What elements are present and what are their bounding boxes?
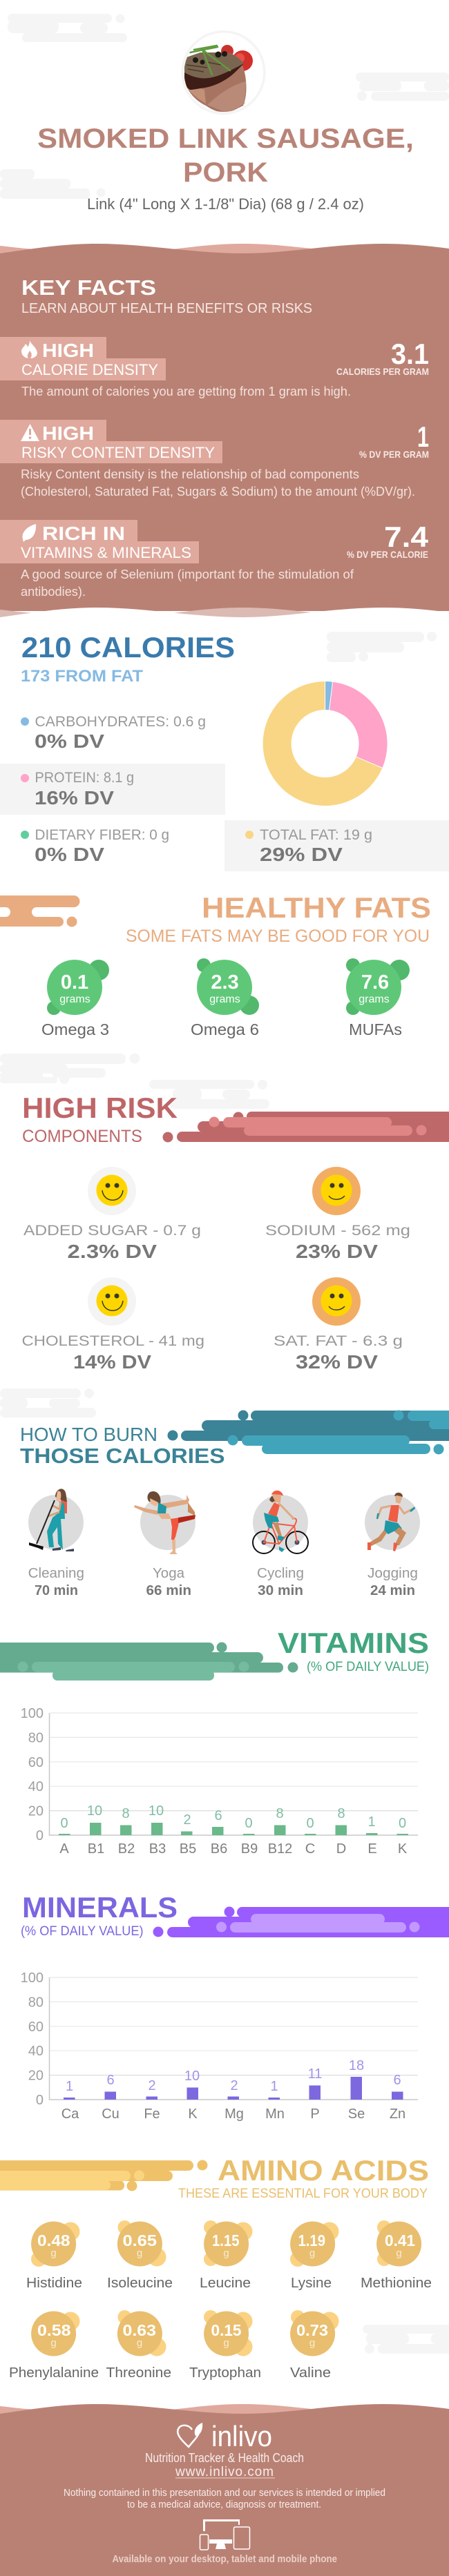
amino: threonine	[106, 2310, 171, 2381]
vitamins bar chart: E	[367, 1841, 377, 1857]
minerals bar chart: Fe	[144, 2107, 160, 2122]
nutrient: protein: 16% DV	[35, 787, 114, 808]
amino: methionine: Methionine	[361, 2276, 432, 2291]
fact: rich in vitamins and minerals: % DV PER CALORIE	[347, 549, 428, 560]
vitamins bar chart: B6	[211, 1841, 227, 1857]
fact: calorie density: CALORIE DENSITY	[21, 361, 158, 378]
disclaimer: to be a medical advice, diagnosis or treatment.	[127, 2499, 321, 2510]
high risk heading: HIGH RISK	[22, 1092, 178, 1124]
nutrient: total fat	[224, 820, 449, 871]
disclaimer	[64, 2487, 385, 2510]
donut chart	[263, 681, 388, 806]
vitamins bar chart: 8	[337, 1806, 345, 1821]
fat: omega 6: 2.3	[211, 971, 239, 994]
high risk heading	[22, 1092, 178, 1146]
vitamins bar chart: 0	[306, 1816, 314, 1831]
vitamins bar chart: 100	[21, 1706, 44, 1721]
amino: isoleucine: 0.65	[123, 2231, 157, 2249]
fat: MUFAs: grams	[359, 994, 390, 1005]
risk: saturated fat: SAT. FAT - 6.3 g	[274, 1333, 403, 1349]
risk: added sugar: ADDED SUGAR - 0.7 g	[23, 1223, 201, 1239]
vitamins bar chart: 40	[28, 1779, 44, 1794]
website link: www.inlivo.com	[175, 2465, 274, 2479]
minerals bar chart: K	[188, 2107, 198, 2122]
fat: omega 6: Omega 6	[191, 1020, 259, 1038]
amino: histidine: 0.48	[37, 2231, 70, 2249]
fact: risky content density: (Cholesterol, Saturated Fat, Sugars & Sodium) to the amount (%DV/gr).	[21, 485, 415, 498]
key facts heading: LEARN ABOUT HEALTH BENEFITS OR RISKS	[21, 301, 312, 316]
amino: valine	[290, 2310, 338, 2381]
activity labels: 70 min	[35, 1583, 78, 1598]
high risk heading: COMPONENTS	[22, 1127, 142, 1146]
activity labels: Cycling	[257, 1566, 304, 1581]
minerals bar chart: 80	[28, 1995, 44, 2010]
amino: lysine: Lysine	[291, 2276, 332, 2291]
inlivo logo	[178, 2420, 272, 2452]
high risk decoration	[163, 1112, 449, 1142]
amino: methionine: 0.41	[385, 2231, 415, 2249]
activity: cycling	[253, 1491, 308, 1553]
amino: tryptophan: g	[223, 2337, 229, 2349]
background cloud: above high risk left	[0, 1054, 140, 1084]
amino: valine: 0.73	[296, 2321, 328, 2339]
title: PORK	[183, 157, 268, 188]
fat: MUFAs	[346, 958, 410, 1038]
fact: rich in vitamins and minerals: VITAMINS & MINERALS	[21, 544, 191, 561]
amino: threonine: 0.63	[123, 2321, 156, 2339]
activity labels: Jogging	[367, 1566, 418, 1581]
activity: yoga	[134, 1491, 195, 1554]
minerals bar chart: 40	[28, 2044, 44, 2059]
fact: calorie density: HIGH	[42, 340, 94, 361]
amino: valine: g	[309, 2337, 315, 2349]
amino: isoleucine: Isoleucine	[107, 2276, 173, 2291]
burn heading: THOSE CALORIES	[20, 1444, 225, 1468]
healthy fats decoration	[0, 895, 80, 927]
risk: saturated fat: 32% DV	[296, 1351, 378, 1373]
amino: valine: Valine	[290, 2365, 331, 2381]
burn decoration	[167, 1410, 449, 1454]
amino acids heading: THESE ARE ESSENTIAL FOR YOUR BODY	[178, 2187, 428, 2201]
vitamins bar chart: C	[305, 1841, 315, 1857]
minerals bar chart: Mg	[224, 2107, 244, 2122]
amino: histidine: Histidine	[26, 2276, 82, 2291]
amino acids heading: AMINO ACIDS	[218, 2154, 429, 2187]
minerals bar chart: Se	[348, 2107, 365, 2122]
minerals bar chart: Mn	[265, 2107, 285, 2122]
disclaimer: Nothing contained in this presentation and our services is intended or implied	[64, 2487, 385, 2499]
background cloud: bottom right	[363, 2325, 449, 2354]
amino: lysine: 1.19	[298, 2231, 325, 2249]
activity labels: 24 min	[370, 1583, 415, 1598]
icon: devices	[200, 2519, 250, 2550]
fat: MUFAs: MUFAs	[349, 1020, 402, 1038]
vitamins bar chart: A	[59, 1841, 69, 1857]
vitamins bar chart: D	[336, 1841, 346, 1857]
vitamins heading	[278, 1627, 429, 1674]
panel: key facts	[0, 244, 449, 621]
nutrient: dietary fiber: 0% DV	[35, 844, 104, 865]
calories heading: 210 CALORIES	[21, 631, 235, 664]
footer panel	[0, 2404, 449, 2576]
vitamins bar chart: B1	[88, 1841, 104, 1857]
vitamins bar chart: 8	[276, 1806, 284, 1821]
amino: leucine: g	[223, 2247, 229, 2259]
amino: lysine: g	[309, 2247, 315, 2259]
amino: threonine: Threonine	[106, 2365, 171, 2381]
healthy fats heading: HEALTHY FATS	[202, 891, 431, 924]
nutrient: total fat: 29% DV	[260, 844, 343, 865]
minerals bar chart	[21, 1970, 418, 2122]
minerals bar chart: 60	[28, 2020, 44, 2035]
fat: omega 3: grams	[59, 994, 90, 1005]
activity labels: Yoga	[153, 1566, 185, 1581]
risk: sodium	[265, 1167, 410, 1262]
fact: risky content density: RISKY CONTENT DENSITY	[21, 444, 215, 461]
vitamins bar chart: B12	[268, 1841, 292, 1857]
vitamins bar chart: 10	[87, 1803, 102, 1819]
fact: risky content density: % DV PER GRAM	[359, 449, 429, 460]
fact: risky content density: 1	[417, 420, 429, 453]
minerals bar chart: 2	[230, 2078, 238, 2093]
fat: MUFAs: 7.6	[361, 971, 389, 994]
tagline: Nutrition Tracker & Health Coach	[145, 2451, 304, 2465]
minerals heading	[21, 1891, 178, 1939]
fat: omega 6: grams	[209, 994, 240, 1005]
minerals bar chart: 20	[28, 2069, 44, 2084]
amino: phenylalanine	[9, 2312, 99, 2381]
key facts heading: KEY FACTS	[21, 275, 156, 300]
nutrient: dietary fiber	[21, 827, 169, 865]
minerals decoration	[153, 1907, 449, 1937]
vitamins decoration	[0, 1642, 298, 1681]
nutrient: dietary fiber: DIETARY FIBER: 0 g	[35, 827, 169, 843]
food photo in circle	[181, 30, 265, 117]
amino: histidine	[26, 2222, 82, 2291]
minerals bar chart: Zn	[390, 2107, 405, 2122]
fact: calorie density: 3.1	[391, 338, 429, 370]
fact: rich in vitamins and minerals: antibodies).	[21, 585, 86, 599]
amino: isoleucine: g	[137, 2247, 142, 2259]
minerals bar chart: 2	[148, 2078, 156, 2093]
activity labels: 30 min	[258, 1583, 303, 1598]
vitamins bar chart: 0	[245, 1816, 253, 1831]
minerals heading: MINERALS	[22, 1891, 178, 1924]
minerals bar chart: Cu	[102, 2107, 120, 2122]
fact: calorie density: CALORIES PER GRAM	[336, 366, 429, 377]
risk: added sugar	[23, 1167, 201, 1262]
amino: phenylalanine: Phenylalanine	[9, 2365, 99, 2381]
activity: jogging	[365, 1493, 420, 1551]
vitamins heading: VITAMINS	[278, 1627, 429, 1659]
risk: sodium: 23% DV	[296, 1241, 378, 1262]
fact: calorie density	[0, 337, 429, 398]
fact: rich in vitamins and minerals: A good source of Selenium (important for the stimulation of	[21, 568, 354, 581]
vitamins bar chart: 1	[367, 1814, 376, 1830]
fat: omega 3: Omega 3	[41, 1020, 109, 1038]
amino: histidine: g	[50, 2247, 57, 2259]
vitamins bar chart: 0	[60, 1816, 68, 1831]
vitamins bar chart: 60	[28, 1755, 44, 1770]
nutrient: total fat: TOTAL FAT: 19 g	[260, 827, 372, 843]
risk: cholesterol	[22, 1277, 204, 1373]
calories heading: 173 FROM FAT	[21, 667, 143, 686]
fact: risky content density: HIGH	[42, 423, 94, 444]
background cloud: calories	[327, 632, 437, 662]
amino: leucine: 1.15	[212, 2231, 240, 2249]
vitamins bar chart: 2	[183, 1812, 191, 1828]
activity labels	[28, 1566, 418, 1598]
amino: tryptophan: Tryptophan	[189, 2365, 261, 2381]
minerals bar chart: P	[310, 2107, 320, 2122]
fact: risky content density: Risky Content density is the relationship of bad components	[21, 467, 359, 481]
nutrient: protein: PROTEIN: 8.1 g	[35, 770, 134, 786]
activity labels: Cleaning	[28, 1566, 84, 1581]
healthy fats heading	[126, 891, 431, 946]
amino: tryptophan	[189, 2310, 261, 2381]
amino acids decoration	[0, 2160, 207, 2191]
amino: isoleucine	[107, 2220, 173, 2291]
vitamins bar chart: 80	[28, 1730, 44, 1745]
fat: omega 3: 0.1	[61, 971, 88, 994]
minerals bar chart: 1	[66, 2079, 73, 2094]
availability note: Available on your desktop, tablet and mobile phone	[112, 2553, 337, 2565]
burn heading	[20, 1424, 225, 1468]
fact: risky content density	[0, 420, 429, 498]
amino: phenylalanine: 0.58	[37, 2321, 71, 2339]
minerals bar chart: 18	[349, 2058, 364, 2073]
nutrient: carbohydrates: 0% DV	[35, 730, 104, 752]
background cloud: burn section	[0, 1388, 96, 1417]
fact: rich in vitamins and minerals: 7.4	[384, 521, 429, 553]
fact: rich in vitamins and minerals: RICH IN	[42, 523, 125, 544]
title: SMOKED LINK SAUSAGE,	[37, 124, 414, 154]
vitamins bar chart: 20	[28, 1804, 44, 1819]
risk: added sugar: 2.3% DV	[68, 1241, 157, 1262]
fat: omega 3	[41, 960, 109, 1038]
vitamins bar chart: 10	[149, 1803, 164, 1819]
vitamins heading: (% OF DAILY VALUE)	[307, 1660, 429, 1674]
vitamins bar chart: 0	[36, 1828, 44, 1843]
vitamins bar chart: B9	[241, 1841, 258, 1857]
activity: cleaning	[28, 1489, 84, 1551]
calories heading	[21, 631, 235, 686]
risk: cholesterol: 14% DV	[73, 1351, 151, 1373]
minerals bar chart: 10	[184, 2069, 200, 2084]
activity labels: 66 min	[146, 1583, 191, 1598]
risk: saturated fat	[274, 1277, 403, 1373]
vitamins bar chart: 6	[214, 1808, 222, 1823]
amino: lysine	[290, 2222, 338, 2291]
background cloud: left of subtitle	[0, 169, 105, 199]
nutrient: protein	[0, 764, 225, 815]
amino: tryptophan: 0.15	[211, 2321, 242, 2339]
vitamins bar chart	[21, 1706, 418, 1857]
risk: cholesterol: CHOLESTEROL - 41 mg	[22, 1333, 204, 1349]
amino: methionine	[361, 2220, 432, 2291]
minerals bar chart: 0	[36, 2093, 44, 2108]
amino: methionine: g	[396, 2247, 402, 2259]
amino: threonine: g	[137, 2337, 142, 2349]
vitamins bar chart: B3	[149, 1841, 166, 1857]
serving size subtitle: Link (4" Long X 1-1/8" Dia) (68 g / 2.4 oz)	[87, 195, 364, 213]
minerals bar chart: 11	[308, 2066, 322, 2082]
healthy fats heading: SOME FATS MAY BE GOOD FOR YOU	[126, 927, 430, 946]
amino: leucine: Leucine	[200, 2276, 251, 2291]
amino: phenylalanine: g	[50, 2337, 57, 2349]
nutrient: carbohydrates	[21, 714, 206, 752]
minerals bar chart: 6	[393, 2073, 401, 2088]
fact: calorie density: The amount of calories you are getting from 1 gram is high.	[21, 385, 351, 398]
risk: sodium: SODIUM - 562 mg	[265, 1223, 410, 1239]
vitamins bar chart: 0	[399, 1816, 406, 1831]
amino: leucine	[200, 2220, 253, 2291]
minerals bar chart: Ca	[61, 2107, 79, 2122]
vitamins bar chart: B5	[180, 1841, 196, 1857]
minerals heading: (% OF DAILY VALUE)	[21, 1924, 144, 1939]
background cloud: above high risk right	[149, 1080, 269, 1109]
fact: rich in vitamins and minerals	[0, 520, 429, 599]
minerals bar chart: 1	[270, 2079, 278, 2094]
vitamins bar chart: B2	[118, 1841, 135, 1857]
background cloud: top right	[356, 72, 449, 101]
vitamins bar chart: 8	[122, 1806, 130, 1821]
key facts heading	[21, 275, 312, 316]
amino acids heading	[178, 2154, 429, 2201]
inlivo logo: inlivo	[211, 2420, 272, 2452]
fat: omega 6	[191, 958, 259, 1038]
vitamins bar chart: K	[398, 1841, 408, 1857]
burn heading: HOW TO BURN	[20, 1424, 157, 1445]
minerals bar chart: 100	[21, 1970, 44, 1986]
minerals bar chart: 6	[106, 2073, 115, 2088]
title	[37, 124, 414, 188]
background cloud: top left	[8, 14, 127, 42]
nutrient: carbohydrates: CARBOHYDRATES: 0.6 g	[35, 714, 206, 730]
